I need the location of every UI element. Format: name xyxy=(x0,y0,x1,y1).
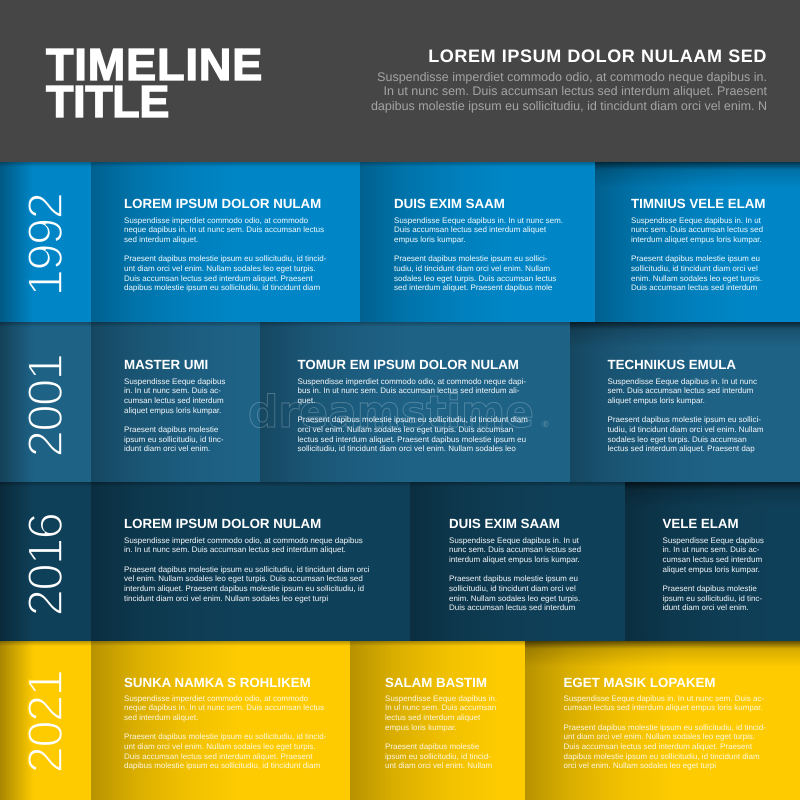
panel: lorem ipsum dolor nulam: tincidunt diam orci vel enim. Nullam sodales leo eget turpi xyxy=(124,594,328,603)
panel: duis exim saam xyxy=(360,162,595,322)
header description: dapibus molestie ipsum eu sollicitudiu, id tincidunt diam orci vel enim. N xyxy=(371,99,767,113)
panel: sunka namka s rohlikem: neque dapibus in. In ut nunc sem. Duis accumsan lectus xyxy=(124,703,324,712)
panel: vele elam: Suspendisse Eeque dapibus xyxy=(662,536,764,545)
panel: vele elam: ipsum eu sollicitudiu, id tinc- xyxy=(662,594,762,603)
panel: eget masik lopakem: Praesent dapibus molestie ipsum eu sollicitudiu, id tincid- xyxy=(564,723,766,732)
panel: duis exim saam: DUIS EXIM SAAM xyxy=(394,196,505,211)
panel: vele elam: in. In ut nunc sem. Duis ac- xyxy=(662,545,759,554)
panel: technikus emula: aliquet empus loris kumpar. xyxy=(608,396,705,405)
panel: vele elam: aliquet empus loris kumpar. xyxy=(662,565,760,574)
panel: master umi: cumsan lectus sed interdum xyxy=(124,396,224,405)
panel: technikus emula: lectus sed interdum aliquet. Praesent dap xyxy=(608,444,755,453)
panel: timnius vele elam: interdum aliquet empus loris kumpar. xyxy=(631,235,762,244)
panel: sunka namka s rohlikem: unt diam orci vel enim. Nullam sodales leo eget turpis. xyxy=(124,742,316,751)
panel: duis exim saam: sollicitudiu, id tincidunt diam orci vel xyxy=(449,584,576,593)
panel: duis exim saam: Suspendisse Eeque dapibus in. In ut xyxy=(449,536,579,545)
panel: timnius vele elam: enim. Nullam sodales leo eget turpis. xyxy=(631,274,762,283)
panel: salam bastim: lectus sed interdum aliquet xyxy=(385,713,480,722)
panel: technikus emula: Suspendisse Eeque dapibus in. In ut nunc xyxy=(608,377,757,386)
watermark: ® xyxy=(542,419,549,429)
header subtitle: LOREM IPSUM DOLOR NULAAM SED xyxy=(428,46,767,66)
panel: eget masik lopakem: unt diam orci vel enim. Nullam sodales leo eget turpis. xyxy=(564,732,755,741)
panel: lorem ipsum dolor nulam: in. In ut nunc sem. Duis accumsan lectus sed interdum aliquet. xyxy=(124,545,346,554)
panel: technikus emula: tudiu, id tincidunt diam orci vel enim. Nullam xyxy=(608,425,764,434)
panel: technikus emula: sem. Duis accumsan lectus sed interdum xyxy=(608,386,753,395)
panel: tomur em ipsum dolor nulam: quet. xyxy=(298,396,315,405)
panel: eget masik lopakem: dapibus molestie ipsum eu sollicitudiu, id tincidunt diam xyxy=(564,752,760,761)
panel: lorem ipsum dolor nulam: unt diam orci vel enim. Nullam sodales leo eget turpis. xyxy=(124,264,316,273)
panel: duis exim saam xyxy=(410,482,625,641)
panel: duis exim saam: Duis accumsan lectus sed interdum aliquet xyxy=(394,225,546,234)
panel: lorem ipsum dolor nulam: LOREM IPSUM DOLOR NULAM xyxy=(124,196,321,211)
panel: lorem ipsum dolor nulam: neque dapibus in. In ut nunc sem. Duis accumsan lectus xyxy=(124,225,324,234)
panel: timnius vele elam: Duis accumsan lectus sed interdum xyxy=(631,283,757,292)
title: TITLE xyxy=(46,76,169,127)
row 2016 xyxy=(0,482,800,641)
panel: tomur em ipsum dolor nulam: bus in. In ut nunc sem. Duis accumsan lectus sed interdum ali- xyxy=(298,386,519,395)
panel: sunka namka s rohlikem: dapibus molestie ipsum eu sollicitudiu, id tincidunt diam xyxy=(124,761,320,770)
panel: technikus emula: sodales leo eget turpis. Duis accumsan xyxy=(608,435,747,444)
panel: salam bastim: Suspendisse Eeque dapibus in. xyxy=(385,694,497,703)
panel: lorem ipsum dolor nulam: dapibus molestie ipsum eu sollicitudiu, id tincidunt diam xyxy=(124,283,320,292)
panel: technikus emula: Praesent dapibus molestie ipsum eu sollici- xyxy=(608,415,761,424)
header description xyxy=(371,70,767,113)
panel: technikus emula: TECHNIKUS EMULA xyxy=(608,357,736,372)
panel: lorem ipsum dolor nulam: Suspendisse imperdiet commodo odio, at commodo xyxy=(124,216,308,225)
panel: duis exim saam: tudiu, id tincidunt diam orci vel enim. Nullam xyxy=(394,264,550,273)
panel: vele elam: VELE ELAM xyxy=(662,516,739,531)
panel: vele elam: idunt diam orci vel enim. xyxy=(662,603,749,612)
panel: eget masik lopakem: Suspendisse Eeque dapibus in. In ut nunc sem. Duis ac- xyxy=(564,694,764,703)
panel: timnius vele elam xyxy=(595,162,800,322)
panel: master umi: MASTER UMI xyxy=(124,357,208,372)
watermark: dreamstime xyxy=(248,387,534,438)
panel: lorem ipsum dolor nulam: Suspendisse imperdiet commodo odio, at commodo neque dapibus xyxy=(124,536,363,545)
panel: eget masik lopakem: EGET MASIK LOPAKEM xyxy=(564,675,715,690)
panel: duis exim saam: interdum aliquet empus loris kumpar. xyxy=(449,555,580,564)
year cell 2016: 2016 xyxy=(18,513,72,616)
header panel xyxy=(0,0,800,162)
panel: timnius vele elam: sollicitudiu, id tincidunt diam orci vel xyxy=(631,264,758,273)
panel: salam bastim: SALAM BASTIM xyxy=(385,675,487,690)
year cell 2021: 2021 xyxy=(18,671,72,773)
panel: sunka namka s rohlikem xyxy=(91,641,350,800)
panel: lorem ipsum dolor nulam: vel enim. Nullam sodales leo eget turpis. Duis accumsan lectus sed xyxy=(124,574,363,583)
panel: vele elam xyxy=(625,482,800,641)
panel: salam bastim: Praesent dapibus molestie xyxy=(385,742,479,751)
panel: duis exim saam: Praesent dapibus molestie ipsum eu xyxy=(449,574,578,583)
panel: tomur em ipsum dolor nulam: orci vel enim. Nullam sodales leo eget turpis. Duis accumsan xyxy=(298,425,513,434)
panel: lorem ipsum dolor nulam: interdum aliquet. Praesent dapibus molestie ipsum eu sollicitudiu, id xyxy=(124,584,364,593)
panel: salam bastim: ipsum eu sollicitudiu, id tincid- xyxy=(385,752,491,761)
panel: master umi: in. In ut nunc sem. Duis ac- xyxy=(124,386,221,395)
panel: tomur em ipsum dolor nulam: Suspendisse imperdiet commodo odio, at commodo neque dapi- xyxy=(298,377,526,386)
panel: duis exim saam: sed interdum aliquet. Praesent dapibus mole xyxy=(394,283,552,292)
panel: eget masik lopakem: cumsan lectus sed interdum aliquet empus loris kumpar. xyxy=(564,703,763,712)
year cell 1992: 1992 xyxy=(18,193,72,296)
title: TIMELINE xyxy=(46,39,263,90)
row 2001 xyxy=(0,322,800,482)
panel: tomur em ipsum dolor nulam: sollicitudiu, id tincidunt diam orci vel enim. Nullam sodales leo xyxy=(298,444,516,453)
panel: eget masik lopakem: orci vel enim. Nullam sodales leo eget turpi xyxy=(564,761,716,770)
panel: lorem ipsum dolor nulam xyxy=(91,162,360,322)
panel: vele elam: Praesent dapibus molestie xyxy=(662,584,757,593)
panel: duis exim saam: sodales leo eget turpis. Duis accumsan lectus xyxy=(394,274,556,283)
panel: master umi: ipsum eu sollicitudiu, id tinc- xyxy=(124,435,224,444)
panel: duis exim saam: nunc sem. Duis accumsan lectus sed xyxy=(449,545,581,554)
header description: In ut nunc sem. Duis accumsan lectus sed interdum aliquet. Praesent xyxy=(383,84,767,98)
title xyxy=(46,39,263,127)
panel: timnius vele elam: Suspendisse Eeque dapibus in. In ut xyxy=(631,216,761,225)
year cell 1992 xyxy=(0,162,91,322)
panel: master umi xyxy=(91,322,260,482)
panel: lorem ipsum dolor nulam: Duis accumsan lectus sed interdum aliquet. Praesent xyxy=(124,274,313,283)
panel: duis exim saam: enim. Nullam sodales leo eget turpis. xyxy=(449,594,580,603)
panel: sunka namka s rohlikem: Praesent dapibus molestie ipsum eu sollicitudiu, id tincid- xyxy=(124,732,326,741)
year cell 2021 xyxy=(0,641,91,800)
panel: lorem ipsum dolor nulam xyxy=(91,482,410,641)
year cell 2001 xyxy=(0,322,91,482)
panel: vele elam: cumsan lectus sed interdum xyxy=(662,555,762,564)
panel: duis exim saam: empus loris kumpar. xyxy=(394,235,466,244)
year cell 2016 xyxy=(0,482,91,641)
header description: Suspendisse imperdiet commodo odio, at commodo neque dapibus in. xyxy=(377,70,767,84)
panel: sunka namka s rohlikem: SUNKA NAMKA S ROHLIKEM xyxy=(124,675,311,690)
panel: tomur em ipsum dolor nulam: Praesent dapibus molestie ipsum eu sollicitudiu, id tincidunt diam xyxy=(298,415,528,424)
panel: lorem ipsum dolor nulam: sed interdum aliquet. xyxy=(124,235,198,244)
panel: lorem ipsum dolor nulam: Praesent dapibus molestie ipsum eu sollicitudiu, id tincidunt diam orci xyxy=(124,565,369,574)
panel: sunka namka s rohlikem: Duis accumsan lectus sed interdum aliquet. Praesent xyxy=(124,752,313,761)
panel: tomur em ipsum dolor nulam: lectus sed interdum aliquet. Praesent dapibus molestie ipsum eu xyxy=(298,435,526,444)
panel: duis exim saam: DUIS EXIM SAAM xyxy=(449,516,560,531)
panel: eget masik lopakem xyxy=(525,641,800,800)
panel: duis exim saam: Suspendisse Eeque dapibus in. In ut nunc sem. xyxy=(394,216,563,225)
panel: eget masik lopakem: Duis accumsan lectus sed interdum aliquet. Praesent xyxy=(564,742,752,751)
panel: salam bastim xyxy=(350,641,525,800)
panel: timnius vele elam: Praesent dapibus molestie ipsum eu xyxy=(631,254,760,263)
panel: salam bastim: unt diam orci vel enim. Nullam xyxy=(385,761,492,770)
row 2021 xyxy=(0,641,800,800)
panel: sunka namka s rohlikem: sed interdum aliquet. xyxy=(124,713,198,722)
panel: tomur em ipsum dolor nulam: TOMUR EM IPSUM DOLOR NULAM xyxy=(298,357,519,372)
panel: lorem ipsum dolor nulam: LOREM IPSUM DOLOR NULAM xyxy=(124,516,321,531)
panel: duis exim saam: Duis accumsan lectus sed interdum xyxy=(449,603,575,612)
panel: tomur em ipsum dolor nulam xyxy=(260,322,570,482)
panel: salam bastim: In ul nunc sem. Duis accumsan xyxy=(385,703,496,712)
panel: technikus emula xyxy=(570,322,800,482)
panel: master umi: idunt diam orci vel enim. xyxy=(124,444,210,453)
panel: salam bastim: empus loris kumpar. xyxy=(385,723,457,732)
panel: lorem ipsum dolor nulam: Praesent dapibus molestie ipsum eu sollicitudiu, id tincid- xyxy=(124,254,326,263)
panel: master umi: Praesent dapibus molestie xyxy=(124,425,218,434)
panel: duis exim saam: Praesent dapibus molestie ipsum eu sollici- xyxy=(394,254,547,263)
row 1992 xyxy=(0,162,800,322)
year cell 2001: 2001 xyxy=(18,355,72,457)
panel: master umi: aliquet empus loris kumpar. xyxy=(124,406,221,415)
panel: master umi: Suspendisse Eeque dapibus xyxy=(124,377,225,386)
panel: timnius vele elam: TIMNIUS VELE ELAM xyxy=(631,196,765,211)
panel: timnius vele elam: nunc sem. Duis accumsan lectus sed xyxy=(631,225,763,234)
panel: sunka namka s rohlikem: Suspendisse imperdiet commodo odio, at commodo xyxy=(124,694,308,703)
